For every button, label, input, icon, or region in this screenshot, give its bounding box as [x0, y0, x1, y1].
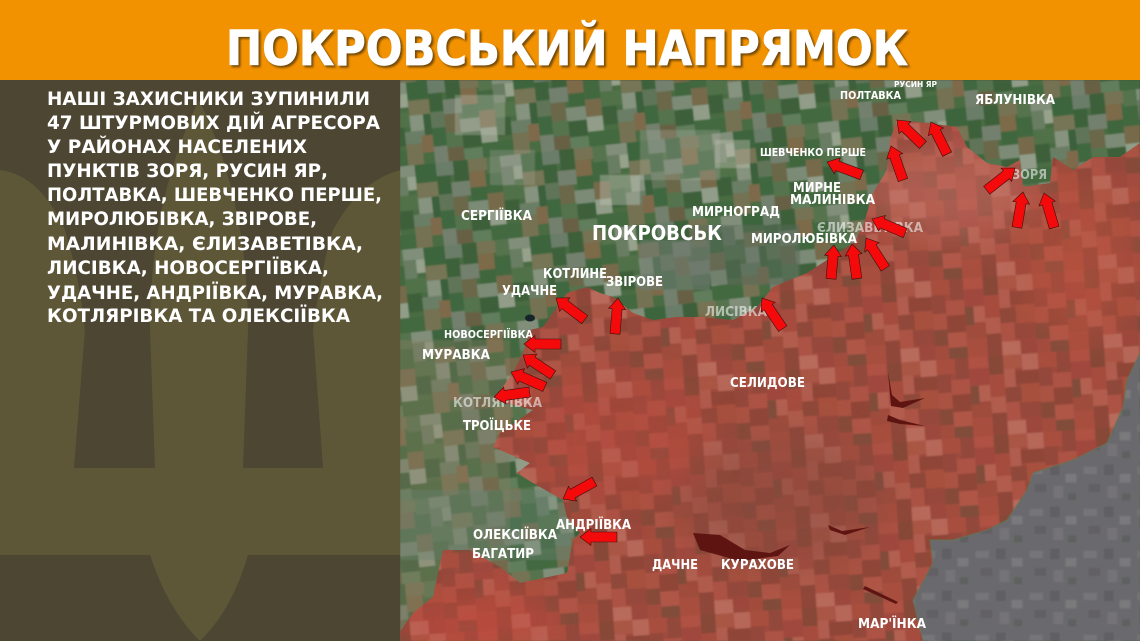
arrow: Зоря south 1	[1009, 191, 1031, 229]
arrow: Звірове	[607, 297, 626, 335]
label: Удачне: УДАЧНЕ	[502, 284, 557, 299]
water body near Novoserhiivka	[525, 314, 535, 322]
text block: summary: 47 ШТУРМОВИХ ДІЙ АГРЕСОРА	[47, 111, 380, 134]
text block: summary: ПУНКТІВ ЗОРЯ, РУСИН ЯР,	[47, 160, 328, 182]
label: Миролюбівка: МИРОЛЮБІВКА	[751, 232, 857, 247]
label: Полтавка: ПОЛТАВКА	[840, 89, 901, 102]
label: Селидове: СЕЛИДОВЕ	[730, 376, 805, 391]
left text panel with trident background	[0, 80, 401, 641]
label: Сергіївка: СЕРГІЇВКА	[461, 208, 532, 224]
arrow: Андріївка	[580, 528, 617, 546]
label: Мирноград: МИРНОГРАД	[692, 205, 780, 220]
arrow: Полтавка 2	[883, 143, 911, 183]
label: Дачне: ДАЧНЕ	[652, 558, 698, 573]
label: Курахове: КУРАХОВЕ	[721, 558, 794, 573]
text block: summary: НАШІ ЗАХИСНИКИ ЗУПИНИЛИ	[47, 88, 370, 110]
label: Шевченко Перше: ШЕВЧЕНКО ПЕРШЕ	[760, 147, 866, 159]
arrow: Миролюбівка 3	[859, 233, 892, 273]
label: Котлярівка: КОТЛЯРІВКА	[453, 396, 542, 411]
text block: summary: МАЛИНІВКА, ЄЛИЗАВЕТІВКА,	[47, 233, 363, 255]
text block: summary: У РАЙОНАХ НАСЕЛЕНИХ	[47, 135, 307, 158]
label: Звірове: ЗВІРОВЕ	[606, 275, 663, 290]
arrow: Шевченко Перше	[824, 154, 865, 183]
label: Мирне: МИРНЕ	[793, 181, 841, 196]
text block: summary	[47, 88, 383, 327]
light fields and town areas	[400, 95, 800, 640]
arrow: Миролюбівка 1	[823, 244, 842, 280]
label: Русин Яр: РУСИН ЯР	[894, 80, 937, 89]
arrow: Зоря south 2	[1036, 191, 1062, 230]
satellite background	[400, 80, 1140, 641]
label: Малинівка: МАЛИНІВКА	[790, 193, 875, 208]
label: Андріївка: АНДРІЇВКА	[556, 517, 631, 533]
text block: summary: КОТЛЯРІВКА ТА ОЛЕКСІЇВКА	[47, 303, 350, 327]
label: Муравка: МУРАВКА	[422, 347, 490, 363]
icon: trident watermark	[0, 100, 401, 641]
arrow: Полтавка 1	[891, 114, 929, 151]
label: Яблунівка: ЯБЛУНІВКА	[975, 93, 1055, 108]
attack arrows	[493, 114, 1062, 546]
arrow: Удачне	[551, 291, 590, 326]
arrow: Муравка 2	[508, 364, 548, 395]
title banner	[0, 0, 1140, 80]
arrow: Муравка 1	[518, 348, 558, 382]
arrow: Новосергіївка	[524, 336, 561, 352]
label: Котлине: КОТЛИНЕ	[543, 267, 607, 282]
arrow: Русин Яр	[923, 118, 955, 158]
arrow: Лисівка	[755, 293, 790, 333]
label: Єлизаветівка: ЄЛИЗАВЕТІВКА	[817, 221, 923, 236]
label: Новосергіївка: НОВОСЕРГІЇВКА	[444, 327, 534, 341]
arrow: Миролюбівка 2	[844, 243, 865, 280]
occupied territory overlay	[400, 80, 1140, 641]
text block: summary: МИРОЛЮБІВКА, ЗВІРОВЕ,	[47, 208, 317, 230]
text block: summary: УДАЧНЕ, АНДРІЇВКА, МУРАВКА,	[47, 280, 383, 304]
label: Мар'їнка: МАР'ЇНКА	[858, 616, 926, 632]
reservoir and ravines	[693, 372, 925, 604]
built-up area east	[860, 330, 1140, 641]
arrow: Зоря north	[981, 161, 1020, 197]
text block: summary: ПОЛТАВКА, ШЕВЧЕНКО ПЕРШЕ,	[47, 184, 382, 206]
front line glow	[913, 353, 1140, 641]
label: Покровськ: ПОКРОВСЬК	[592, 221, 723, 245]
place labels	[422, 80, 1055, 632]
arrow: Андріївка north	[559, 474, 599, 506]
label: Лисівка: ЛИСІВКА	[705, 305, 767, 320]
label: Зоря: ЗОРЯ	[1012, 168, 1047, 183]
title text: ПОКРОВСЬКИЙ НАПРЯМОК	[226, 20, 908, 77]
label: Олексіївка: ОЛЕКСІЇВКА	[473, 527, 557, 543]
text block: summary: ЛИСІВКА, НОВОСЕРГІЇВКА,	[47, 255, 329, 279]
map panel	[400, 80, 1140, 641]
arrow: Котлярівка	[493, 384, 531, 405]
label: Троїцьке: ТРОЇЦЬКЕ	[463, 418, 531, 434]
label: Багатир: БАГАТИР	[472, 547, 534, 562]
arrow: Єлизаветівка	[869, 211, 908, 241]
